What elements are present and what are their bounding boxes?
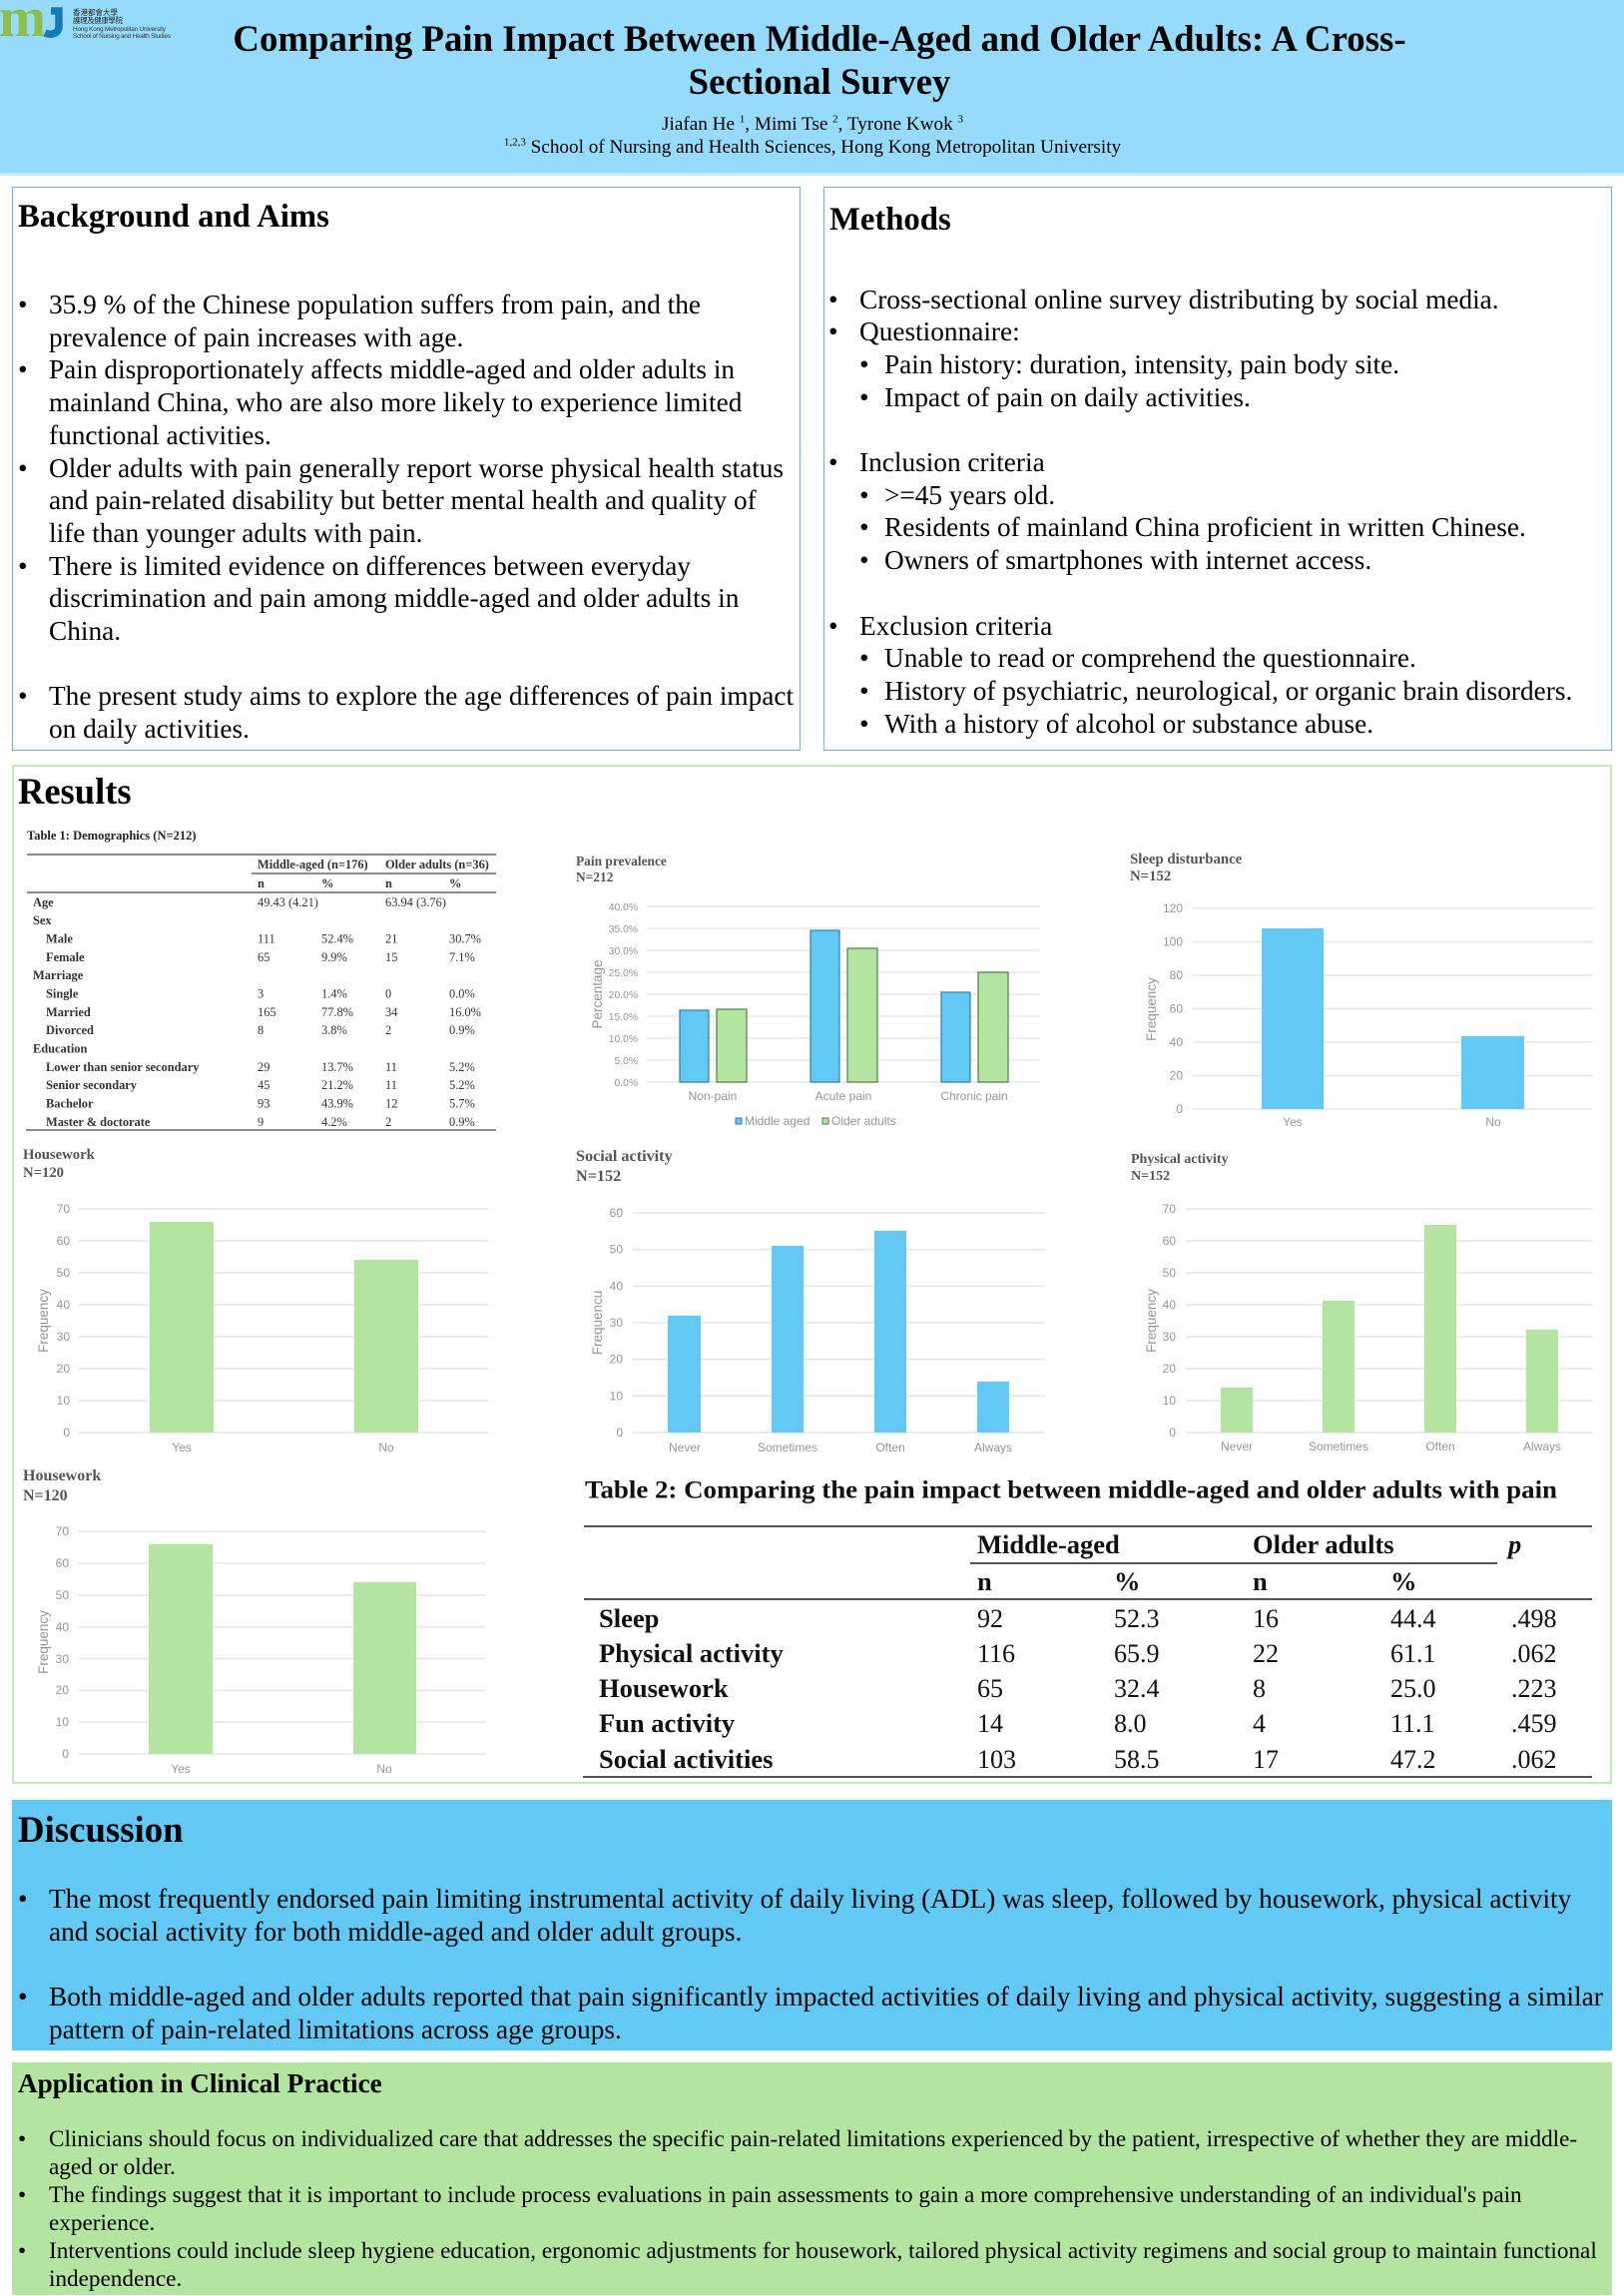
table 1 values: 34 bbox=[385, 1005, 397, 1019]
bullet list: methods: • bbox=[859, 480, 869, 510]
bullet list: clinical practice: Interventions could include sleep hygiene education, ergonomic adjustments for housework, tailored physical activity regimens and social group to maintain functional bbox=[49, 2238, 1597, 2264]
table 1 values: 0 bbox=[385, 986, 391, 1000]
title: Comparing Pain Impact Between Middle-Aged and Older Adults: A Cross- bbox=[233, 18, 1406, 59]
bars: older adults bbox=[717, 948, 1008, 1082]
panel: methods: • bbox=[828, 316, 838, 346]
y axis title: Percentage bbox=[590, 959, 605, 1029]
table 1 values: 8 bbox=[258, 1023, 264, 1037]
bullet list: methods bbox=[828, 284, 1572, 739]
legend: Middle aged bbox=[745, 1114, 810, 1128]
table 1 values: 77.8% bbox=[321, 1005, 353, 1019]
x axis labels: Always bbox=[974, 1440, 1012, 1454]
y axis labels: 35.0% bbox=[609, 924, 638, 935]
y axis labels: 20.0% bbox=[609, 990, 638, 1001]
bullet list: methods: • bbox=[859, 709, 869, 739]
bars bbox=[149, 1544, 416, 1754]
bullet list: background bbox=[18, 289, 794, 744]
y axis labels: 60 bbox=[1163, 1234, 1176, 1248]
panel: discussion bbox=[12, 1800, 1612, 2050]
panel: discussion: • bbox=[18, 1982, 28, 2011]
chart title: sleep disturbance: N=152 bbox=[1130, 868, 1171, 884]
table 1 header row: n bbox=[385, 876, 392, 890]
table 1 row labels: Divorced bbox=[46, 1023, 94, 1037]
y axis labels: 0.0% bbox=[615, 1078, 638, 1089]
table 1 row labels: Single bbox=[46, 986, 79, 1000]
bullet list: methods: With a history of alcohol or substance abuse. bbox=[884, 709, 1373, 739]
table 1 row labels: Sex bbox=[33, 913, 52, 927]
table 2 values: 44.4 bbox=[1390, 1604, 1435, 1633]
table 2 values: 8 bbox=[1253, 1674, 1266, 1703]
y axis labels: 30.0% bbox=[609, 946, 638, 957]
table 2 values: 16 bbox=[1253, 1604, 1279, 1633]
chart: housework (top) bbox=[23, 1147, 488, 1454]
heading: background and aims: Background and Aims bbox=[18, 198, 329, 234]
table 2 values: .498 bbox=[1511, 1604, 1557, 1633]
bars: middle aged bbox=[680, 930, 970, 1082]
bullet list: background: mainland China, who are also more likely to experience limited bbox=[49, 387, 742, 417]
table 2 values: .062 bbox=[1511, 1639, 1557, 1668]
x axis labels: No bbox=[378, 1440, 394, 1454]
x axis labels: Non-pain bbox=[689, 1089, 737, 1103]
authors: 1,2,3 School of Nursing and Health Sciences, Hong Kong Metropolitan University bbox=[504, 136, 1121, 158]
table 1 values bbox=[258, 895, 481, 1129]
table 1 row labels: Female bbox=[46, 950, 85, 964]
y axis labels: 0 bbox=[63, 1426, 70, 1439]
table 1 row labels: Bachelor bbox=[46, 1096, 94, 1110]
panel: background and aims bbox=[12, 187, 801, 751]
panel: application in clinical practice: • bbox=[18, 2182, 26, 2208]
table 1 values: 0.9% bbox=[449, 1023, 475, 1037]
table 1 values: 93 bbox=[258, 1096, 270, 1110]
x axis labels: Always bbox=[1523, 1439, 1561, 1453]
bullet list: background: life than younger adults with pain. bbox=[49, 518, 423, 548]
table 1 values: 5.2% bbox=[449, 1060, 475, 1074]
table 2 header: n bbox=[977, 1566, 992, 1596]
panel: methods: • bbox=[828, 611, 838, 641]
table 2 values: 25.0 bbox=[1390, 1674, 1435, 1703]
y axis labels: 0 bbox=[616, 1426, 623, 1439]
y axis labels: 20 bbox=[610, 1353, 623, 1367]
table 2 header: % bbox=[1390, 1566, 1417, 1596]
x axis labels: Yes bbox=[172, 1440, 192, 1454]
x axis labels: Acute pain bbox=[815, 1089, 871, 1103]
y axis labels: 15.0% bbox=[609, 1012, 638, 1023]
panel: application in clinical practice: • bbox=[18, 2238, 26, 2264]
table 1 values: 165 bbox=[258, 1005, 276, 1019]
chart: housework (bottom) bbox=[23, 1467, 486, 1776]
x axis labels: Chronic pain bbox=[940, 1089, 1008, 1103]
logo: Hong Kong Metropolitan University: Hong Kong Metropolitan University bbox=[73, 26, 167, 33]
table 2 row labels: Housework bbox=[599, 1673, 729, 1703]
table 1 values: 11 bbox=[385, 1078, 397, 1092]
header banner bbox=[0, 0, 1624, 176]
y axis labels bbox=[57, 1202, 70, 1439]
table 1 row labels: Male bbox=[46, 932, 73, 946]
table 1 header row: n bbox=[258, 876, 265, 890]
table 1 values: 111 bbox=[258, 932, 275, 946]
table 1 row labels: Senior secondary bbox=[46, 1078, 138, 1092]
panel: application in clinical practice: • bbox=[18, 2126, 26, 2152]
bullet list: discussion: and social activity for both middle-aged and older adult groups. bbox=[49, 1917, 742, 1947]
heading: results: Results bbox=[18, 771, 132, 812]
bars bbox=[668, 1231, 1009, 1433]
y axis labels: 30 bbox=[1163, 1330, 1176, 1344]
table 1 header row: % bbox=[449, 876, 461, 890]
table 2 values: .062 bbox=[1511, 1745, 1557, 1774]
bullet list: background: The present study aims to explore the age differences of pain impact bbox=[49, 681, 794, 711]
y axis labels bbox=[1163, 1202, 1176, 1439]
table 1 values: 5.7% bbox=[449, 1096, 475, 1110]
table 1 values: 65 bbox=[258, 950, 270, 964]
panel: methods bbox=[823, 187, 1612, 751]
bullet list: methods: Pain history: duration, intensity, pain body site. bbox=[884, 349, 1399, 379]
y axis labels: 25.0% bbox=[609, 968, 638, 979]
bullet list: discussion bbox=[18, 1884, 1603, 2044]
table 1 values: 45 bbox=[258, 1078, 270, 1092]
table 1 values: 9.9% bbox=[321, 950, 347, 964]
table 1 values: 0.0% bbox=[449, 986, 475, 1000]
authors bbox=[504, 113, 1122, 158]
table 1 values: 52.4% bbox=[321, 932, 353, 946]
table 1 values: 29 bbox=[258, 1060, 270, 1074]
table 1 values: 9 bbox=[258, 1115, 264, 1129]
y axis labels: 30 bbox=[610, 1316, 623, 1330]
panel: methods: • bbox=[828, 284, 838, 313]
table 2 values bbox=[977, 1604, 1557, 1774]
heading: discussion: Discussion bbox=[18, 1809, 184, 1849]
y axis labels: 20 bbox=[57, 1362, 70, 1376]
x axis labels bbox=[1221, 1439, 1561, 1453]
table 2 values: 52.3 bbox=[1114, 1604, 1160, 1633]
y axis labels bbox=[1163, 901, 1183, 1116]
bullet list: discussion: The most frequently endorsed pain limiting instrumental activity of daily living (ADL) was sleep, followed by housework, physical activity bbox=[49, 1884, 1571, 1914]
bullet list: methods: History of psychiatric, neurological, or organic brain disorders. bbox=[884, 676, 1572, 706]
table 1 values: 3.8% bbox=[321, 1023, 347, 1037]
bullet list: background: There is limited evidence on differences between everyday bbox=[49, 551, 691, 581]
logo: Hong Kong Metropolitan University: School of Nursing and Health Studies bbox=[73, 33, 171, 40]
bullet list: methods: Exclusion criteria bbox=[859, 611, 1052, 641]
bullet list: methods: • bbox=[859, 382, 869, 412]
x axis labels: Never bbox=[1221, 1439, 1253, 1453]
table 1 values: 2 bbox=[385, 1115, 391, 1129]
y axis labels: 20 bbox=[56, 1683, 69, 1697]
x axis labels bbox=[1283, 1115, 1501, 1129]
panel: background and aims: • bbox=[18, 681, 28, 711]
table 2 values: 8.0 bbox=[1114, 1709, 1146, 1738]
y axis labels: 40.0% bbox=[609, 902, 638, 913]
chart title: housework: N=120 bbox=[23, 1165, 64, 1181]
panel: background and aims: • bbox=[18, 453, 28, 483]
table 1 values: 43.9% bbox=[321, 1096, 353, 1110]
table 2 values: 22 bbox=[1253, 1639, 1279, 1668]
bullet list: methods: • bbox=[859, 545, 869, 575]
table 2 values: 32.4 bbox=[1114, 1674, 1160, 1703]
bullet list: methods: Questionnaire: bbox=[859, 316, 1020, 346]
y axis labels: 10.0% bbox=[609, 1034, 638, 1045]
table 1: demographics bbox=[26, 829, 496, 1130]
table 1 values: 7.1% bbox=[449, 950, 475, 964]
y axis title: Frequency bbox=[1144, 977, 1159, 1041]
y axis title: Frequency bbox=[1144, 1289, 1159, 1353]
chart: sleep disturbance bbox=[1130, 852, 1593, 1129]
table 1 row labels bbox=[33, 895, 200, 1129]
bullet list: methods: Unable to read or comprehend the questionnaire. bbox=[884, 643, 1416, 673]
title bbox=[233, 18, 1406, 102]
table 1 values: 4.2% bbox=[321, 1115, 347, 1129]
table 1 header row: Older adults (n=36) bbox=[385, 858, 489, 871]
table 1 row labels: Master & doctorate bbox=[46, 1115, 151, 1129]
y axis labels: 0 bbox=[1176, 1102, 1183, 1116]
bullet list: background: prevalence of pain increases with age. bbox=[49, 322, 463, 352]
table 1 row labels: Marriage bbox=[33, 968, 84, 982]
bullet list: background: functional activities. bbox=[49, 420, 271, 450]
table 1 title: Table 1: Demographics (N=212) bbox=[27, 829, 197, 843]
chart: physical activity bbox=[1131, 1152, 1593, 1453]
bullet list: methods: Inclusion criteria bbox=[859, 447, 1045, 477]
y axis labels: 40 bbox=[57, 1298, 70, 1312]
panel: background and aims: • bbox=[18, 354, 28, 384]
table 1 values: 0.9% bbox=[449, 1115, 475, 1129]
table 2 row labels: Social activities bbox=[599, 1744, 773, 1774]
bullet list: methods: Residents of mainland China proficient in written Chinese. bbox=[884, 512, 1526, 542]
table 1 row labels: Lower than senior secondary bbox=[46, 1060, 200, 1074]
bullet list: methods: • bbox=[859, 676, 869, 706]
y axis labels: 60 bbox=[1170, 1002, 1183, 1016]
heading: methods: Methods bbox=[829, 202, 951, 238]
y axis labels: 30 bbox=[57, 1330, 70, 1344]
bullet list: discussion: Both middle-aged and older adults reported that pain significantly impacted activities of daily living and physical activity, suggesting a similar bbox=[49, 1982, 1603, 2011]
logo: Hong Kong Metropolitan University bbox=[0, 0, 171, 49]
table 1 row labels: Age bbox=[33, 895, 54, 909]
y axis labels: 50 bbox=[56, 1588, 69, 1602]
y axis labels: 5.0% bbox=[615, 1056, 638, 1067]
y axis labels: 0 bbox=[62, 1747, 69, 1761]
table 2 values: 11.1 bbox=[1390, 1709, 1435, 1738]
table 1 values: 13.7% bbox=[321, 1060, 353, 1074]
x axis labels: Often bbox=[875, 1440, 905, 1454]
table 1 header row: Middle-aged (n=176) bbox=[258, 858, 368, 871]
chart title: social activity: Social activity bbox=[576, 1147, 673, 1165]
chart title: physical activity: N=152 bbox=[1131, 1169, 1170, 1184]
legend bbox=[736, 1114, 896, 1128]
bullet list: clinical practice: experience. bbox=[49, 2210, 155, 2236]
y axis title: Frequency bbox=[36, 1289, 51, 1353]
bars bbox=[150, 1222, 418, 1433]
y axis labels: 30 bbox=[56, 1652, 69, 1666]
y axis labels: 10 bbox=[56, 1715, 69, 1729]
x axis labels bbox=[669, 1440, 1012, 1454]
y axis labels: 70 bbox=[57, 1202, 70, 1216]
y axis labels: 0 bbox=[1169, 1426, 1176, 1439]
table 2 header bbox=[977, 1529, 1521, 1596]
table 2 row labels: Physical activity bbox=[599, 1638, 784, 1668]
table 1 values: 30.7% bbox=[449, 932, 481, 946]
chart title: housework: Housework bbox=[23, 1147, 95, 1163]
bullet list: clinical practice bbox=[18, 2126, 1597, 2292]
bullet list: methods: • bbox=[859, 349, 869, 379]
table 2 row labels bbox=[599, 1603, 784, 1774]
table 1 values: 15 bbox=[385, 950, 397, 964]
bullet list: clinical practice: independence. bbox=[49, 2266, 182, 2292]
x axis labels: Often bbox=[1425, 1439, 1455, 1453]
logo: Hong Kong Metropolitan University: 護理及健康學院 bbox=[73, 15, 124, 26]
y axis labels: 40 bbox=[1170, 1035, 1183, 1049]
x axis labels: No bbox=[376, 1762, 392, 1776]
bullet list: methods: Owners of smartphones with internet access. bbox=[884, 545, 1371, 575]
bullet list: background: 35.9 % of the Chinese population suffers from pain, and the bbox=[49, 289, 701, 319]
table 2 header: n bbox=[1253, 1566, 1268, 1596]
bullet list: background: China. bbox=[49, 616, 121, 646]
table 2 header: % bbox=[1114, 1566, 1140, 1596]
chart title: sleep disturbance: Sleep disturbance bbox=[1130, 852, 1242, 867]
panel: methods: • bbox=[828, 447, 838, 477]
bars bbox=[1221, 1225, 1558, 1433]
y axis labels: 70 bbox=[56, 1524, 69, 1538]
bullet list: clinical practice: aged or older. bbox=[49, 2154, 176, 2180]
table 2 values: 65.9 bbox=[1114, 1639, 1160, 1668]
y axis labels: 70 bbox=[1163, 1202, 1176, 1216]
y axis labels: 80 bbox=[1170, 968, 1183, 982]
table 2 values: 58.5 bbox=[1114, 1745, 1160, 1774]
bullet list: background: Pain disproportionately affects middle-aged and older adults in bbox=[49, 354, 735, 384]
x axis labels: Yes bbox=[171, 1762, 191, 1776]
table 2 values: .459 bbox=[1511, 1709, 1557, 1738]
table 2 row labels: Fun activity bbox=[599, 1708, 735, 1738]
bullet list: methods: • bbox=[859, 643, 869, 673]
bullet list: methods: • bbox=[859, 512, 869, 542]
y axis labels: 50 bbox=[57, 1266, 70, 1280]
panel: background and aims: • bbox=[18, 551, 28, 581]
table 1 header row bbox=[258, 858, 489, 890]
title: Sectional Survey bbox=[689, 61, 950, 102]
y axis labels: 10 bbox=[57, 1394, 70, 1408]
x axis labels bbox=[172, 1440, 394, 1454]
table 1 values: 3 bbox=[258, 986, 264, 1000]
bullet list: methods: >=45 years old. bbox=[884, 480, 1055, 510]
table 2 header: Middle-aged bbox=[977, 1529, 1120, 1559]
chart title: pain prevalence: N=212 bbox=[576, 869, 614, 884]
bullet list: background: and pain-related disability but better mental health and quality of bbox=[49, 485, 757, 515]
table 2 values: 65 bbox=[977, 1674, 1003, 1703]
y axis labels: 20 bbox=[1170, 1068, 1183, 1082]
bullet list: clinical practice: The findings suggest that it is important to include process evaluations in pain assessments to gain a more comprehensive understanding of an individual's pain bbox=[49, 2182, 1522, 2208]
panel: results bbox=[12, 765, 1612, 1784]
y axis labels: 60 bbox=[57, 1234, 70, 1248]
table 2 header: Older adults bbox=[1253, 1529, 1394, 1559]
y axis labels: 20 bbox=[1163, 1362, 1176, 1376]
y axis labels: 10 bbox=[1163, 1394, 1176, 1408]
table 2 values: 17 bbox=[1253, 1745, 1279, 1774]
panel: discussion: • bbox=[18, 1884, 28, 1914]
table 1 values: 12 bbox=[385, 1096, 397, 1110]
bullet list: background: on daily activities. bbox=[49, 714, 250, 744]
table 1 values: 11 bbox=[385, 1060, 397, 1074]
y axis labels: 60 bbox=[610, 1206, 623, 1220]
table 2 values: 14 bbox=[977, 1709, 1003, 1738]
table 2: pain impact comparison bbox=[583, 1475, 1592, 1777]
chart title: social activity: N=152 bbox=[576, 1167, 621, 1185]
y axis labels: 120 bbox=[1163, 901, 1183, 915]
y axis labels: 40 bbox=[610, 1279, 623, 1293]
table 1 values: 16.0% bbox=[449, 1005, 481, 1019]
y axis labels: 40 bbox=[56, 1620, 69, 1634]
table 2 title: Table 2: Comparing the pain impact between middle-aged and older adults with pain bbox=[585, 1475, 1557, 1503]
y axis labels: 10 bbox=[610, 1389, 623, 1403]
y axis labels: 50 bbox=[1163, 1266, 1176, 1280]
table 2 header: p bbox=[1506, 1529, 1521, 1559]
table 1 values: 5.2% bbox=[449, 1078, 475, 1092]
logo: Hong Kong Metropolitan University: 香港都會大學 bbox=[73, 7, 118, 18]
y axis labels: 60 bbox=[56, 1556, 69, 1570]
bars bbox=[1262, 928, 1524, 1109]
table 1 values: 1.4% bbox=[321, 986, 347, 1000]
table 2 row labels: Sleep bbox=[599, 1603, 659, 1633]
bullet list: background: discrimination and pain among middle-aged and older adults in bbox=[49, 583, 739, 613]
panel: application in clinical practice bbox=[12, 2062, 1612, 2295]
table 1 row labels: Married bbox=[46, 1005, 91, 1019]
authors: Jiafan He 1, Mimi Tse 2, Tyrone Kwok 3 bbox=[662, 113, 963, 134]
table 2 values: .223 bbox=[1511, 1674, 1557, 1703]
bullet list: background: Older adults with pain generally report worse physical health status bbox=[49, 453, 784, 483]
bullet list: methods: Cross-sectional online survey distributing by social media. bbox=[859, 284, 1499, 313]
chart title: pain prevalence: Pain prevalence bbox=[576, 854, 667, 868]
x axis labels bbox=[689, 1089, 1008, 1103]
heading: application in clinical practice: Application in Clinical Practice bbox=[18, 2068, 382, 2098]
y axis labels: 50 bbox=[610, 1243, 623, 1257]
x axis labels: Never bbox=[669, 1440, 701, 1454]
y axis labels: 100 bbox=[1163, 934, 1183, 948]
x axis labels: Sometimes bbox=[758, 1440, 817, 1454]
panel: background and aims: • bbox=[18, 289, 28, 319]
table 2 values: 61.1 bbox=[1390, 1639, 1435, 1668]
bullet list: discussion: pattern of pain-related limitations across age groups. bbox=[49, 2014, 622, 2044]
chart: pain prevalence bbox=[576, 854, 1040, 1128]
table 1 values: 49.43 (4.21) bbox=[258, 895, 318, 909]
table 1 values: 2 bbox=[385, 1023, 391, 1037]
chart title: physical activity: Physical activity bbox=[1131, 1152, 1229, 1167]
table 2 values: 103 bbox=[977, 1745, 1016, 1774]
table 1 values: 21.2% bbox=[321, 1078, 353, 1092]
table 2 values: 4 bbox=[1253, 1709, 1266, 1738]
y axis labels: 40 bbox=[1163, 1298, 1176, 1312]
x axis labels: No bbox=[1485, 1115, 1501, 1129]
table 1 row labels: Education bbox=[33, 1042, 88, 1056]
y axis title: Frequency bbox=[36, 1610, 51, 1674]
x axis labels bbox=[171, 1762, 392, 1776]
y axis labels bbox=[56, 1524, 69, 1761]
bullet list: clinical practice: Clinicians should focus on individualized care that addresses the specific pain-related limitations experienced by the patient, irrespective of whether they are middle- bbox=[49, 2126, 1577, 2152]
bullet list: methods: Impact of pain on daily activities. bbox=[884, 382, 1251, 412]
y axis labels bbox=[610, 1206, 623, 1439]
legend: Older adults bbox=[831, 1114, 896, 1128]
table 1 header row: % bbox=[321, 876, 333, 890]
x axis labels: Sometimes bbox=[1309, 1439, 1368, 1453]
table 1 values: 21 bbox=[385, 932, 397, 946]
chart: social activity bbox=[576, 1147, 1045, 1454]
chart title: housework: Housework bbox=[23, 1467, 101, 1484]
table 2 values: 116 bbox=[977, 1639, 1015, 1668]
table 2 values: 47.2 bbox=[1390, 1745, 1435, 1774]
y axis title: Frequencu bbox=[590, 1291, 605, 1355]
y axis labels bbox=[609, 902, 638, 1089]
chart title: housework: N=120 bbox=[23, 1487, 68, 1504]
x axis labels: Yes bbox=[1283, 1115, 1303, 1129]
table 2 values: 92 bbox=[977, 1604, 1003, 1633]
table 1 values: 63.94 (3.76) bbox=[385, 895, 446, 909]
